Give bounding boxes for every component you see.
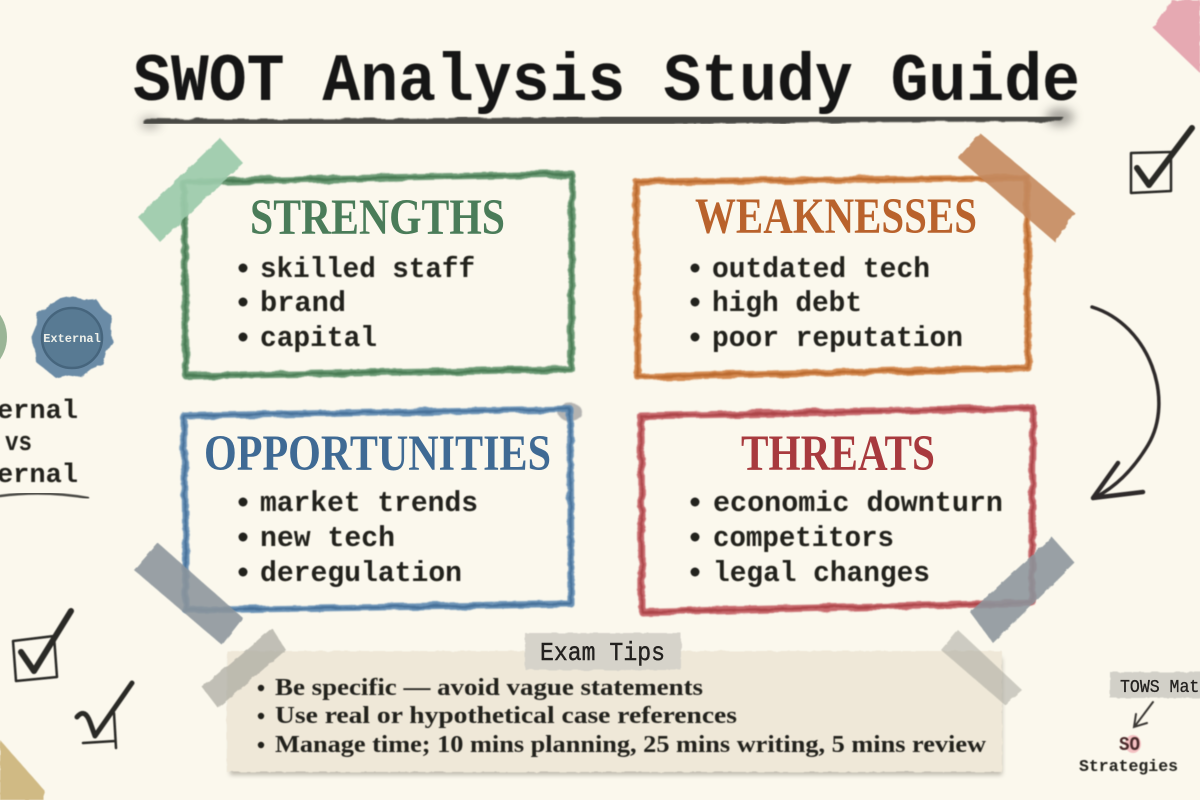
tips list: Be specific — avoid vague statements (275, 675, 703, 701)
icon: checkbox top right (1131, 128, 1192, 193)
threats tape (970, 537, 1075, 643)
strengths heading: STRENGTHS (250, 190, 505, 246)
tips list (258, 675, 987, 758)
panel: exam tips (202, 628, 1022, 775)
so strategies text: Strategies (1079, 758, 1178, 777)
strengths list: skilled staff (260, 253, 475, 286)
panel: threats (641, 408, 1075, 643)
title underline (140, 108, 1074, 129)
weaknesses heading: WEAKNESSES (695, 189, 977, 245)
so strategies text: SO (1119, 734, 1140, 756)
panel: weaknesses (636, 133, 1075, 377)
weaknesses list: poor reputation (712, 322, 963, 355)
tows matrix note (1079, 672, 1200, 777)
opportunities list: market trends (260, 487, 478, 520)
exam tips label tab (525, 633, 681, 670)
threats list: economic downturn (713, 487, 1003, 520)
panel: opportunities (134, 403, 582, 645)
weaknesses tape (958, 133, 1075, 242)
opportunities list (238, 487, 478, 590)
opportunities frame (184, 403, 582, 610)
strengths list (238, 253, 475, 355)
weaknesses list (690, 253, 963, 355)
opportunities tape (134, 543, 243, 645)
icon: checkbox left (13, 611, 71, 681)
internal vs external text (0, 397, 78, 491)
opportunities heading: OPPORTUNITIES (204, 426, 551, 482)
arrow: curved process arrow (1092, 307, 1159, 498)
threats frame (641, 408, 1033, 612)
opportunities list: new tech (260, 522, 395, 555)
arrow: tows to so (1134, 702, 1153, 727)
tips list: Manage time; 10 mins planning, 25 mins writing, 5 mins review (275, 732, 987, 758)
strengths list: brand (260, 287, 346, 320)
exam tips heading: Exam Tips (540, 638, 665, 668)
threats heading: THREATS (741, 426, 935, 482)
tows label tape (1110, 672, 1200, 698)
icon: open tick left (77, 683, 132, 748)
so strategies text (1079, 734, 1178, 777)
so highlight (1125, 735, 1141, 753)
weaknesses frame (636, 178, 1028, 377)
threats list (690, 487, 1003, 590)
tape: note right (941, 630, 1022, 705)
sidebar underline (0, 494, 88, 498)
internal vs external text: vs (5, 429, 32, 459)
weaknesses list: outdated tech (712, 253, 930, 286)
tape: pink corner (1153, 0, 1200, 73)
threats list: legal changes (713, 557, 930, 590)
tape: tan corner (0, 740, 44, 800)
strengths tape (138, 138, 243, 242)
tape: note left (202, 628, 286, 708)
title: SWOT Analysis Study Guide (133, 44, 1080, 121)
panel: strengths (138, 138, 572, 376)
strengths list: capital (260, 322, 377, 355)
note paper (227, 651, 1002, 775)
weaknesses list: high debt (712, 287, 862, 320)
opportunities list: deregulation (260, 557, 462, 590)
strengths frame (184, 174, 572, 376)
internal vs external sidebar (0, 296, 113, 498)
tips list: Use real or hypothetical case references (275, 703, 737, 729)
icon: green wax seal (0, 298, 7, 376)
icon: external wax seal (31, 296, 113, 378)
threats list: competitors (713, 522, 894, 555)
icon: external wax seal: External (43, 332, 101, 346)
